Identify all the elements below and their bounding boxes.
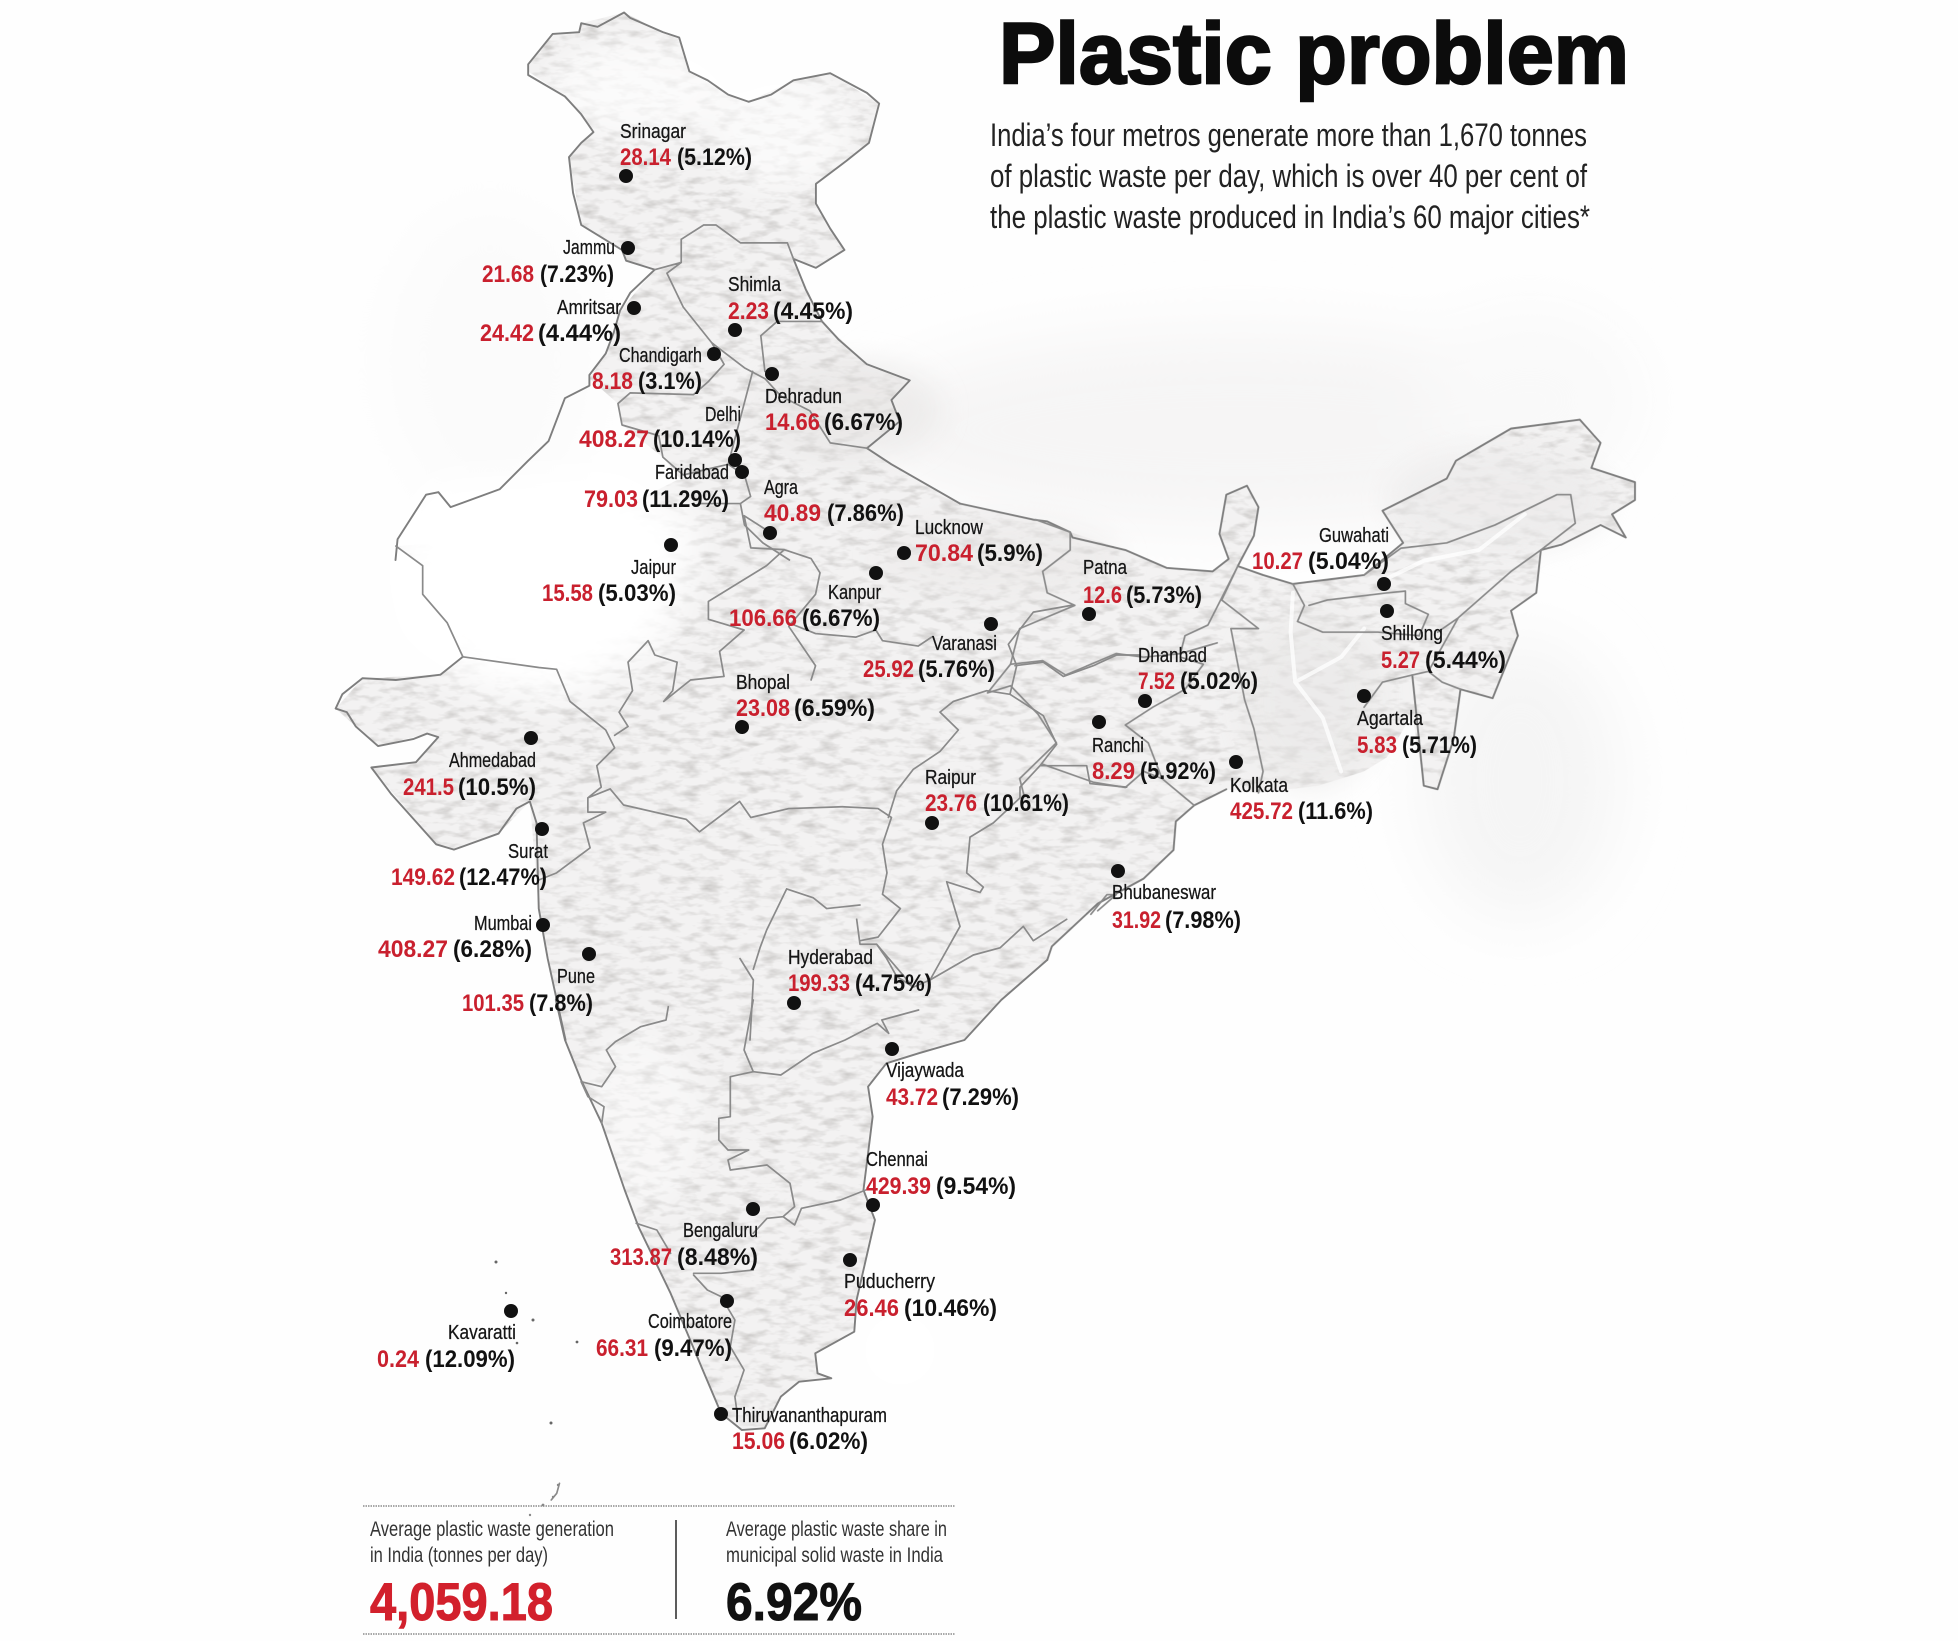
city: Chennai: (9.54%) bbox=[936, 1173, 1016, 1200]
city: Ranchi: 8.29 bbox=[1092, 758, 1135, 785]
city: Bhopal bbox=[735, 672, 875, 734]
city: Srinagar bbox=[619, 121, 752, 183]
city: Pune: 101.35 bbox=[462, 990, 524, 1017]
city: Puducherry bbox=[843, 1253, 997, 1322]
city: Lucknow bbox=[897, 517, 1043, 567]
city: Agartala: 5.83 bbox=[1357, 732, 1397, 759]
city: Bhubaneswar: 31.92 bbox=[1112, 907, 1161, 934]
subtitle bbox=[990, 117, 1590, 235]
stat: average plastic waste generation: Average plastic waste generation bbox=[370, 1518, 614, 1541]
city: Pune: (7.8%) bbox=[529, 990, 593, 1017]
city: Dehradun: (6.67%) bbox=[824, 409, 903, 436]
city: Puducherry: (10.46%) bbox=[904, 1295, 997, 1322]
city: Ranchi: Ranchi bbox=[1092, 735, 1144, 757]
city: Chennai bbox=[866, 1149, 1016, 1212]
city: Chandigarh: 8.18 bbox=[592, 368, 633, 395]
stat: average plastic waste share: Average plastic waste share in bbox=[726, 1518, 947, 1541]
city: Bengaluru: Bengaluru bbox=[683, 1220, 758, 1242]
subtitle: India’s four metros generate more than 1,670 tonnes bbox=[990, 117, 1587, 153]
city: Agartala: Agartala bbox=[1357, 708, 1424, 730]
city: Chennai: Chennai bbox=[866, 1149, 928, 1171]
city: Bhopal: (6.59%) bbox=[794, 695, 875, 722]
city: Dhanbad: Dhanbad bbox=[1138, 645, 1207, 667]
city: Agra: 40.89 bbox=[764, 500, 821, 527]
city: Coimbatore: (9.47%) bbox=[654, 1335, 732, 1362]
city: Coimbatore: 66.31 bbox=[596, 1335, 648, 1362]
city: Bengaluru bbox=[610, 1202, 760, 1271]
city: Bengaluru: 313.87 bbox=[610, 1244, 672, 1271]
city: Dhanbad bbox=[1138, 645, 1258, 708]
city: Agra bbox=[763, 477, 904, 540]
city: Delhi: 408.27 bbox=[579, 426, 649, 453]
surrounding terrain shading bbox=[390, 210, 1640, 920]
city: Surat: Surat bbox=[508, 841, 548, 863]
city: Jaipur: Jaipur bbox=[631, 557, 676, 579]
city: Chennai: 429.39 bbox=[866, 1173, 931, 1200]
panel: national averages bbox=[363, 1484, 955, 1634]
city: Faridabad: 79.03 bbox=[584, 486, 638, 513]
city: Kavaratti: (12.09%) bbox=[425, 1346, 515, 1373]
city: Thiruvananthapuram: (6.02%) bbox=[789, 1428, 868, 1455]
map: rivers in Assam and Bangladesh bbox=[1291, 514, 1525, 771]
city: Mumbai: (6.28%) bbox=[453, 936, 532, 963]
city: Amritsar bbox=[480, 297, 641, 347]
city: Patna: 12.6 bbox=[1083, 582, 1122, 609]
city: Guwahati bbox=[1252, 525, 1391, 591]
terrain tone overlays bbox=[385, 40, 1610, 1400]
city: Srinagar: 28.14 bbox=[620, 144, 672, 171]
city: Raipur: 23.76 bbox=[925, 790, 977, 817]
city: Jaipur: 15.58 bbox=[542, 580, 593, 607]
city: Patna: Patna bbox=[1083, 557, 1128, 579]
subtitle: the plastic waste produced in India’s 60 major cities* bbox=[990, 199, 1590, 235]
city: Mumbai bbox=[378, 913, 550, 963]
city: Bhopal: 23.08 bbox=[736, 695, 790, 722]
city: Mumbai: Mumbai bbox=[474, 913, 532, 935]
city: Jaipur bbox=[542, 538, 678, 607]
city: Surat bbox=[391, 822, 549, 891]
city: Varanasi bbox=[863, 617, 998, 683]
city: Vijaywada bbox=[885, 1042, 1019, 1111]
map: state and national boundaries bbox=[336, 12, 1635, 1500]
city: Pune bbox=[462, 947, 596, 1017]
city: Jammu: Jammu bbox=[563, 237, 615, 259]
city: Guwahati: Guwahati bbox=[1319, 525, 1389, 547]
city: Bhubaneswar: (7.98%) bbox=[1165, 907, 1241, 934]
city: Pune: Pune bbox=[557, 966, 595, 988]
city: Faridabad: (11.29%) bbox=[642, 486, 729, 513]
city: Lucknow: Lucknow bbox=[915, 517, 983, 539]
city: Amritsar: (4.44%) bbox=[538, 320, 621, 347]
city: Faridabad bbox=[584, 462, 749, 513]
city: Kolkata bbox=[1229, 755, 1373, 825]
city: Puducherry: 26.46 bbox=[844, 1295, 899, 1322]
city: Srinagar: (5.12%) bbox=[677, 144, 752, 171]
stat: average plastic waste share bbox=[726, 1518, 947, 1632]
city: Vijaywada: Vijaywada bbox=[886, 1060, 965, 1082]
city: Jammu: (7.23%) bbox=[540, 261, 614, 288]
city: Delhi: (10.14%) bbox=[653, 426, 741, 453]
city: Raipur: (10.61%) bbox=[983, 790, 1069, 817]
city: Vijaywada: 43.72 bbox=[886, 1084, 938, 1111]
city: Chandigarh: (3.1%) bbox=[638, 368, 702, 395]
city: Kavaratti: Kavaratti bbox=[448, 1322, 516, 1344]
stat: average plastic waste generation: in India (tonnes per day) bbox=[370, 1544, 548, 1567]
city: Mumbai: 408.27 bbox=[378, 936, 448, 963]
city: Coimbatore bbox=[596, 1294, 734, 1362]
city: Kavaratti: 0.24 bbox=[377, 1346, 420, 1373]
stat: average plastic waste generation bbox=[370, 1518, 614, 1632]
city: Hyderabad bbox=[787, 947, 932, 1010]
city: Kavaratti bbox=[377, 1304, 518, 1373]
islands: Lakshadweep specks bbox=[494, 1260, 578, 1424]
city: Varanasi: (5.76%) bbox=[918, 656, 995, 683]
city: Ranchi: (5.92%) bbox=[1140, 758, 1216, 785]
city: Thiruvananthapuram: Thiruvananthapuram bbox=[732, 1405, 887, 1427]
city: Hyderabad: 199.33 bbox=[788, 970, 850, 997]
city: Surat: (12.47%) bbox=[459, 864, 547, 891]
city: Patna bbox=[1082, 557, 1202, 621]
city: Kanpur: 106.66 bbox=[729, 605, 797, 632]
city: Delhi: Delhi bbox=[705, 404, 741, 426]
city: Hyderabad: Hyderabad bbox=[788, 947, 873, 969]
city: Kolkata: Kolkata bbox=[1230, 775, 1289, 797]
city: Delhi bbox=[579, 404, 742, 467]
city: Ahmedabad bbox=[403, 731, 538, 801]
city: Shimla bbox=[728, 274, 853, 337]
city: Agra: Agra bbox=[764, 477, 799, 499]
city: Bhopal: Bhopal bbox=[736, 672, 790, 694]
subtitle: of plastic waste per day, which is over 40 per cent of bbox=[990, 158, 1587, 194]
city: Hyderabad: (4.75%) bbox=[855, 970, 932, 997]
city: Ranchi bbox=[1092, 715, 1216, 785]
city: Bhubaneswar: Bhubaneswar bbox=[1112, 882, 1216, 904]
city: Shillong bbox=[1380, 604, 1506, 674]
city: Guwahati: (5.04%) bbox=[1308, 548, 1389, 575]
city: Faridabad: Faridabad bbox=[655, 462, 729, 484]
city: Jammu: 21.68 bbox=[482, 261, 534, 288]
city: Srinagar: Srinagar bbox=[620, 121, 686, 143]
city: Dehradun: 14.66 bbox=[765, 409, 820, 436]
city: Ahmedabad: 241.5 bbox=[403, 774, 454, 801]
city: Thiruvananthapuram: 15.06 bbox=[732, 1428, 785, 1455]
city: Vijaywada: (7.29%) bbox=[942, 1084, 1019, 1111]
city: Kanpur: (6.67%) bbox=[802, 605, 880, 632]
map: India land fill bbox=[336, 12, 1635, 1430]
stat: average plastic waste share: municipal solid waste in India bbox=[726, 1544, 943, 1567]
city: Dehradun bbox=[765, 367, 903, 436]
city: Agartala bbox=[1357, 689, 1477, 759]
city: Shillong: (5.44%) bbox=[1425, 647, 1506, 674]
city: Kolkata: 425.72 bbox=[1230, 798, 1293, 825]
city: Lucknow: 70.84 bbox=[915, 540, 974, 567]
city: Dhanbad: 7.52 bbox=[1138, 668, 1175, 695]
city: Ahmedabad: (10.5%) bbox=[458, 774, 536, 801]
city: Puducherry: Puducherry bbox=[844, 1271, 935, 1293]
city: Raipur: Raipur bbox=[925, 767, 976, 789]
city: Bhubaneswar bbox=[1111, 864, 1241, 934]
stat: average plastic waste share: 6.92% bbox=[726, 1573, 862, 1632]
city: Agra: (7.86%) bbox=[827, 500, 904, 527]
city: Kolkata: (11.6%) bbox=[1298, 798, 1373, 825]
city: Patna: (5.73%) bbox=[1126, 582, 1202, 609]
stat: average plastic waste generation: 4,059.18 bbox=[370, 1573, 553, 1632]
city: Jammu bbox=[482, 237, 635, 288]
city: Guwahati: 10.27 bbox=[1252, 548, 1303, 575]
city: Varanasi: 25.92 bbox=[863, 656, 914, 683]
city: Shimla: Shimla bbox=[728, 274, 782, 296]
city: Varanasi: Varanasi bbox=[932, 633, 997, 655]
city: Dhanbad: (5.02%) bbox=[1180, 668, 1258, 695]
city: Agartala: (5.71%) bbox=[1402, 732, 1477, 759]
city: Lucknow: (5.9%) bbox=[977, 540, 1043, 567]
city: Ahmedabad: Ahmedabad bbox=[449, 750, 536, 772]
title: Plastic problem bbox=[999, 6, 1629, 102]
city: Kanpur: Kanpur bbox=[828, 582, 881, 604]
city: Shillong: 5.27 bbox=[1381, 647, 1420, 674]
city: Surat: 149.62 bbox=[391, 864, 455, 891]
city: Shimla: 2.23 bbox=[728, 298, 769, 325]
city: Chandigarh bbox=[592, 345, 721, 395]
city: Thiruvananthapuram bbox=[714, 1405, 887, 1455]
city: Coimbatore: Coimbatore bbox=[648, 1311, 732, 1333]
city: Shimla: (4.45%) bbox=[773, 298, 853, 325]
city: Amritsar: 24.42 bbox=[480, 320, 534, 347]
city: Bengaluru: (8.48%) bbox=[677, 1244, 758, 1271]
city: Kanpur bbox=[729, 566, 883, 632]
city: Chandigarh: Chandigarh bbox=[619, 345, 702, 367]
city: Amritsar: Amritsar bbox=[557, 297, 621, 319]
city: Jaipur: (5.03%) bbox=[598, 580, 676, 607]
city: Shillong: Shillong bbox=[1381, 623, 1443, 645]
city: Raipur bbox=[925, 767, 1069, 830]
city: Dehradun: Dehradun bbox=[765, 386, 842, 408]
